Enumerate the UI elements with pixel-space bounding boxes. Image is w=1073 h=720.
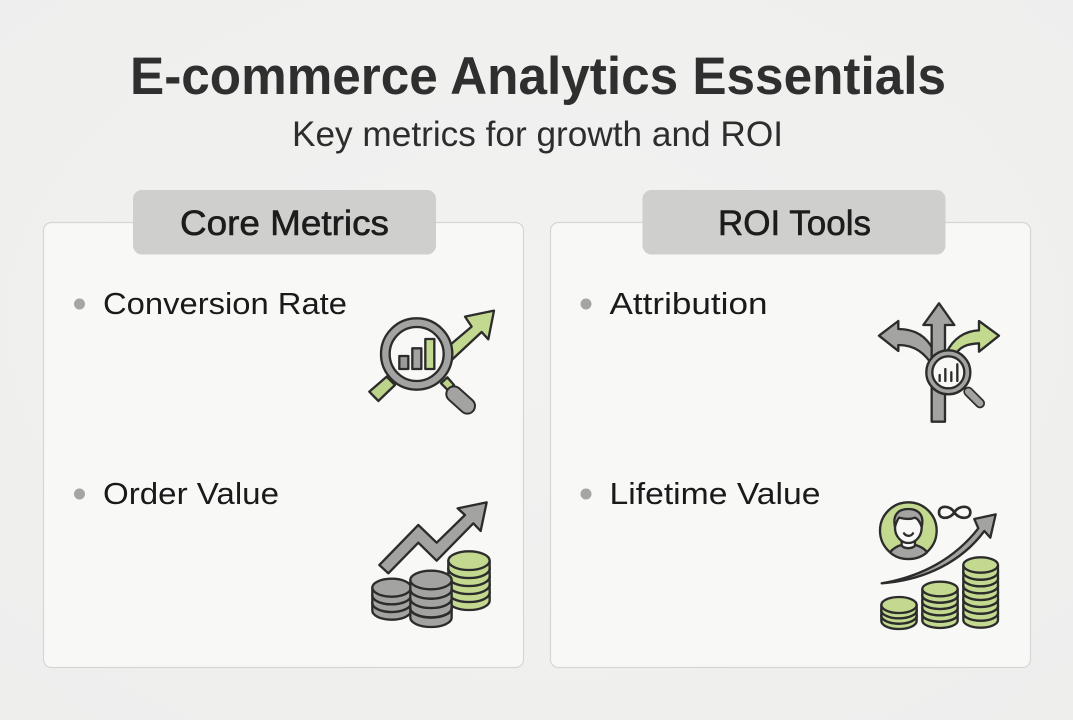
bullet: order value: Order Value [103,476,279,511]
icon: branching arrows with magnifier [879,303,999,422]
heading: roi tools: ROI Tools [718,204,871,243]
bullet: lifetime value: Lifetime Value [610,476,820,511]
title: E-commerce Analytics Essentials [130,47,946,106]
panel: core metrics [44,190,524,668]
heading: roi tools [642,190,946,254]
bullet: attribution: Attribution [610,286,768,321]
heading: core metrics: Core Metrics [180,204,389,243]
icon: customer lifetime value coins [880,502,998,629]
bullet: conversion rate: Conversion Rate [103,286,347,321]
heading: core metrics [133,190,436,254]
panel: roi tools [550,190,1030,668]
subtitle: Key metrics for growth and ROI [292,115,783,154]
icon: magnifier on growth arrow [369,311,494,406]
icon: coins with rising arrow [372,502,490,627]
